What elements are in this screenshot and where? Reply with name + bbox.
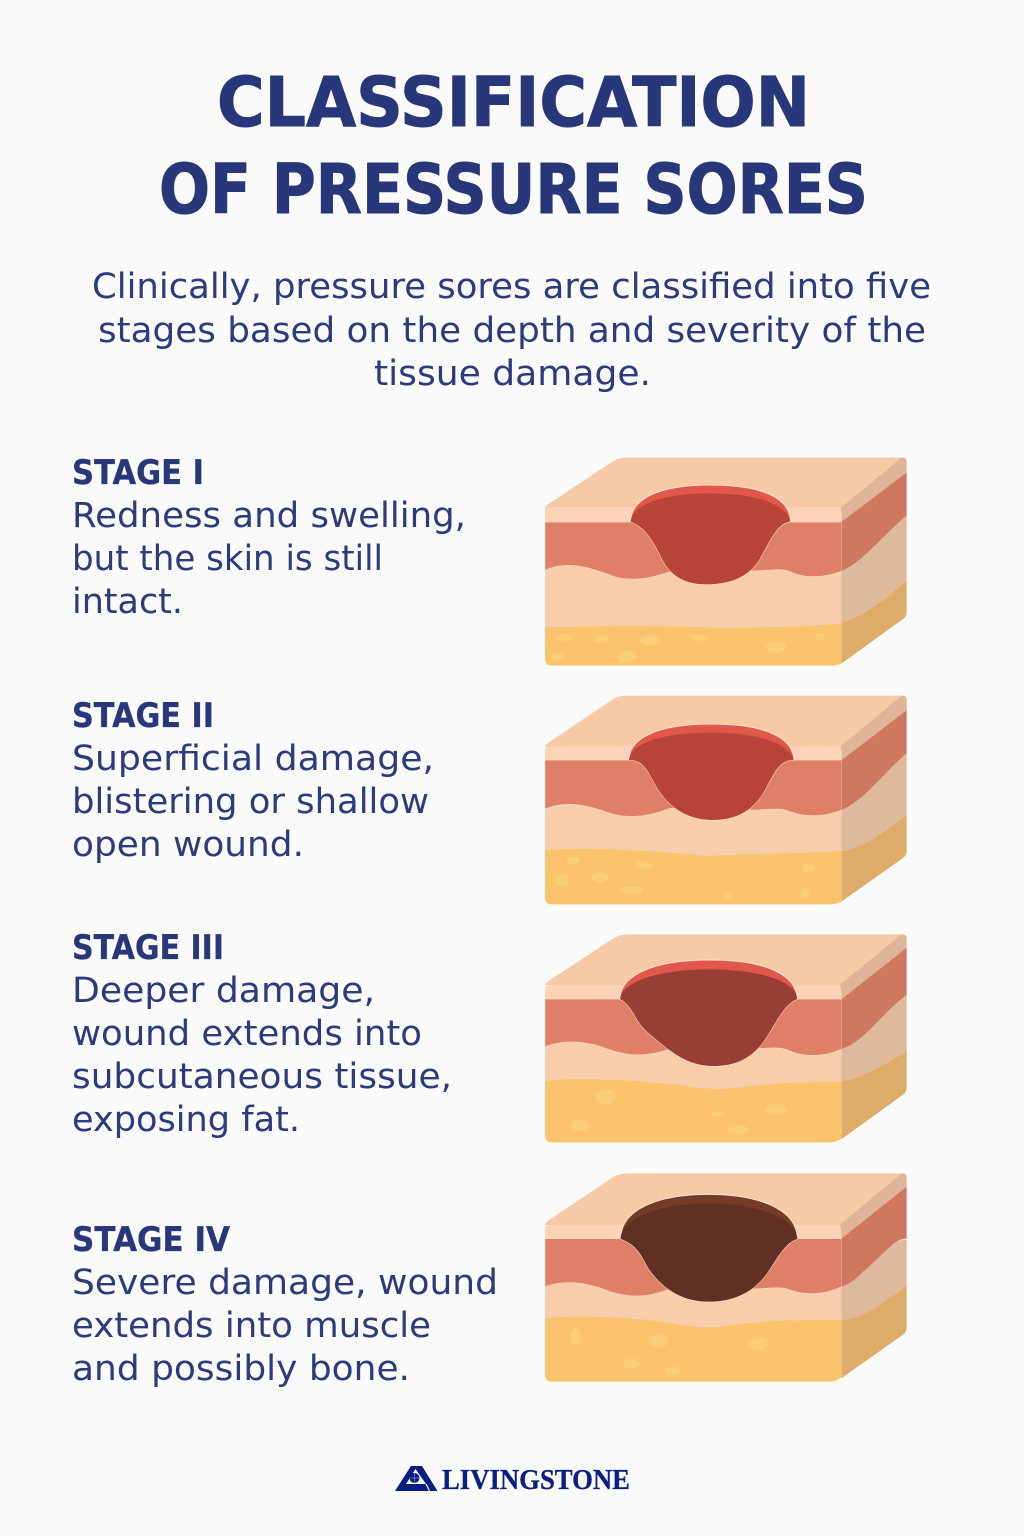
logo wordmark: LIVINGSTONE (442, 1464, 630, 1496)
intro paragraph (92, 267, 931, 394)
intro paragraph: Clinically, pressure sores are classified into five (92, 267, 931, 307)
text block: stage I (72, 453, 466, 622)
text block: stage II: STAGE II (72, 696, 214, 735)
text block: stage III: STAGE III (72, 928, 224, 967)
illustration: stage I skin block (545, 458, 907, 666)
text block: stage III: Deeper damage, (72, 971, 375, 1011)
text block: stage III: wound extends into (72, 1014, 422, 1054)
text block: stage II: Superficial damage, (72, 739, 434, 779)
icon: triangle emblem (395, 1466, 438, 1491)
text block: stage III (72, 928, 452, 1140)
title (159, 63, 868, 230)
intro paragraph: stages based on the depth and severity of the (98, 311, 926, 351)
text block: stage IV: extends into muscle (72, 1306, 431, 1346)
text block: stage IV: STAGE IV (72, 1220, 230, 1259)
wound: stage III (620, 960, 797, 1066)
intro paragraph: tissue damage. (374, 354, 651, 394)
illustration: stage II skin block (545, 696, 907, 904)
wound: stage I (631, 485, 791, 584)
text block: stage I: STAGE I (72, 453, 204, 492)
text block: stage I: but the skin is still (72, 539, 383, 579)
title: CLASSIFICATION (217, 63, 810, 143)
text block: stage III: subcutaneous tissue, (72, 1057, 452, 1097)
text block: stage I: Redness and swelling, (72, 496, 466, 536)
text block: stage III: exposing fat. (72, 1100, 300, 1140)
text block: stage IV: Severe damage, wound (72, 1263, 498, 1303)
text block: stage IV (72, 1220, 498, 1389)
wound: stage II (629, 724, 794, 820)
text block: stage II: open wound. (72, 825, 304, 865)
illustration: stage IV skin block (545, 1173, 907, 1382)
text block: stage II (72, 696, 434, 865)
title: OF PRESSURE SORES (159, 150, 868, 230)
illustration: stage III skin block (545, 934, 907, 1142)
wound: stage IV (621, 1194, 797, 1302)
text block: stage IV: and possibly bone. (72, 1349, 410, 1389)
logo: Livingstone (395, 1464, 630, 1496)
text block: stage II: blistering or shallow (72, 782, 429, 822)
text block: stage I: intact. (72, 582, 183, 622)
